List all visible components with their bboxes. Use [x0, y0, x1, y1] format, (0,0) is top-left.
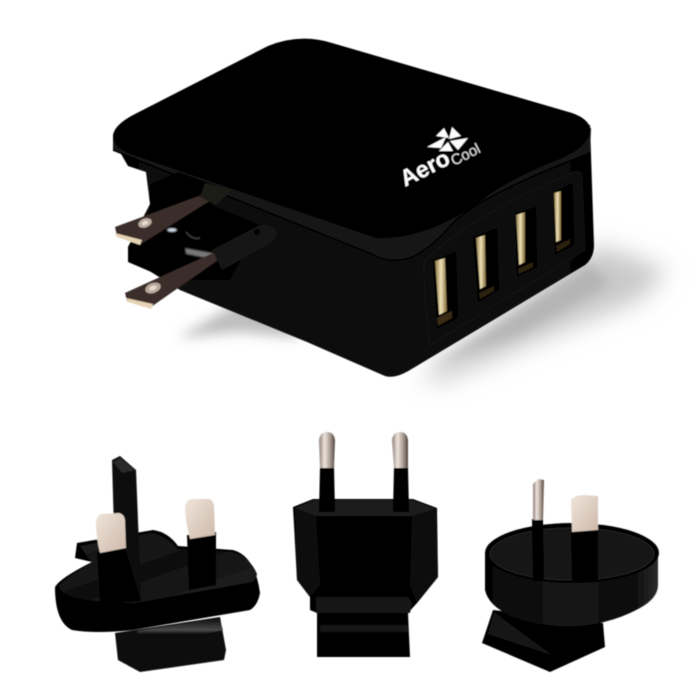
charger body	[113, 39, 594, 377]
disc side	[485, 553, 658, 626]
earth pin	[112, 456, 141, 600]
USB port 1	[433, 252, 458, 329]
disc top	[485, 523, 659, 583]
body	[293, 499, 438, 657]
logo mark	[427, 127, 468, 151]
USB port 3	[515, 207, 537, 277]
lower band	[316, 597, 412, 613]
plate	[55, 530, 260, 632]
side walls	[113, 100, 594, 377]
top face	[113, 39, 590, 238]
top bevel	[295, 500, 436, 516]
logo wordmark: Aero	[395, 144, 454, 191]
neutral pin	[187, 532, 216, 590]
AU adapter	[482, 479, 659, 672]
live pin	[97, 548, 141, 604]
band under top face	[113, 128, 591, 260]
wide pin	[571, 530, 598, 582]
side facets	[295, 508, 320, 597]
shadow beneath charger	[178, 245, 668, 382]
pin right	[393, 467, 409, 512]
US prong 2	[125, 225, 277, 309]
logo	[395, 127, 483, 191]
base clip	[115, 617, 226, 672]
base clip	[482, 610, 605, 672]
USB port 2	[473, 228, 499, 302]
US prong 1	[115, 183, 232, 245]
thin pin	[532, 519, 544, 581]
UK adapter	[55, 456, 260, 672]
plate top	[59, 533, 257, 603]
logo wordmark light: Cool	[448, 140, 483, 170]
USB panel outline	[424, 172, 585, 345]
USB port 4	[553, 183, 574, 255]
seam line	[113, 150, 590, 260]
EU adapter	[293, 432, 438, 657]
recessed socket area with lights	[128, 172, 260, 280]
pin left	[319, 467, 335, 512]
